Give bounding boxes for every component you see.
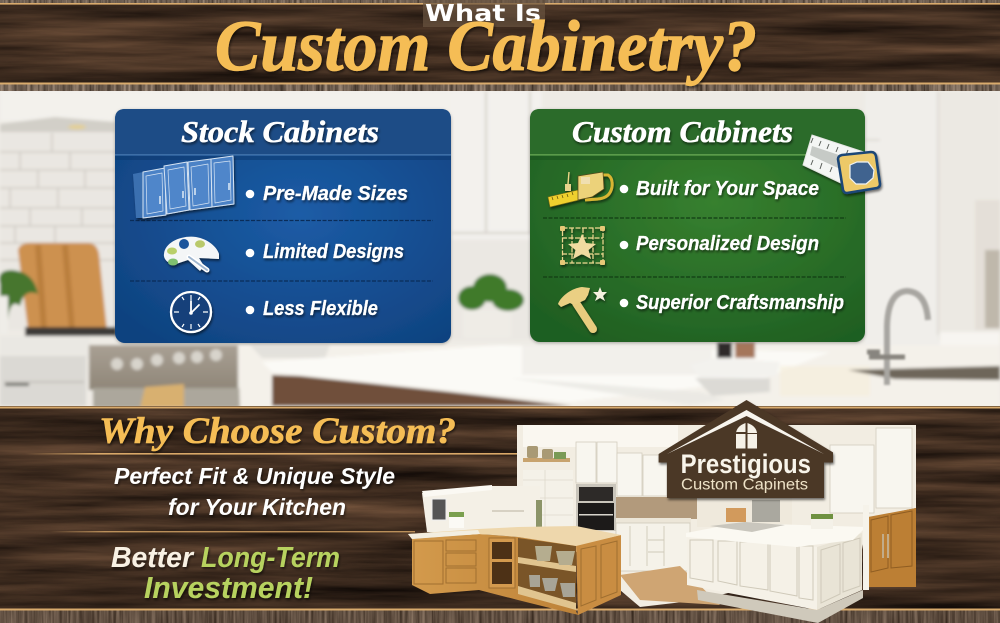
title: What Is — [425, 1, 541, 27]
oven — [576, 484, 616, 531]
top wood banner — [0, 0, 1000, 91]
bullet: less flexible: Less Flexible — [263, 297, 378, 320]
logo: prestigious custom capinets — [659, 400, 833, 498]
cutting board — [18, 243, 107, 330]
icon: tape measure — [803, 135, 880, 193]
upper cabinets — [576, 428, 912, 513]
callout: long-term investment — [111, 542, 340, 605]
callout: long-term investment: Better — [111, 542, 195, 574]
icon: window — [736, 423, 757, 448]
bullet: superior craftsmanship: Superior Craftsmanship — [636, 291, 844, 314]
kitchen illustration — [408, 425, 916, 623]
text: perfect fit — [114, 463, 395, 520]
roof chevron — [667, 410, 824, 454]
panel: stock cabinets — [115, 109, 451, 343]
sink — [848, 366, 1000, 380]
heading: custom cabinets: Custom Cabinets — [572, 114, 793, 149]
back lower cabinets — [616, 518, 691, 571]
icon: clock — [171, 292, 211, 332]
heading: stock cabinets: Stock Cabinets — [181, 114, 379, 149]
text: perfect fit: Perfect Fit & Unique Style — [114, 463, 395, 489]
background kitchen photo — [0, 85, 1000, 415]
oak cabinets — [408, 526, 621, 615]
shelf with pots — [523, 446, 570, 462]
bullet: personalized design: Personalized Design — [636, 232, 819, 255]
heading: why choose custom: Why Choose Custom? — [99, 411, 456, 452]
hutch — [422, 485, 542, 535]
logo: prestigious custom capinets: Prestigious — [681, 449, 811, 479]
dividers — [130, 220, 433, 281]
text: perfect fit: for Your Kitchen — [168, 494, 346, 520]
bullet: limited designs: Limited Designs — [263, 240, 404, 263]
callout: long-term investment: Investment! — [144, 570, 313, 605]
island — [686, 514, 866, 623]
icon: palette — [164, 237, 219, 271]
dividers — [543, 218, 846, 277]
backsplash — [616, 497, 698, 519]
icon: ruler and tape — [548, 172, 612, 207]
callout: long-term investment: Long-Term — [201, 542, 340, 574]
plant — [463, 310, 511, 338]
range — [89, 345, 238, 390]
back wall — [517, 425, 916, 607]
logo: prestigious custom capinets: Custom Capinets — [681, 476, 808, 494]
title: Custom Cabinetry? — [215, 6, 757, 86]
bottom wood banner — [0, 406, 1000, 623]
bullet: built for your space: Built for Your Space — [636, 177, 819, 200]
icon: cabinet doors — [133, 156, 234, 218]
icon: design grid with star — [560, 226, 605, 265]
bullet: pre-made sizes: Pre-Made Sizes — [263, 182, 408, 205]
counter and lower wood cabinets — [237, 385, 277, 406]
icon: hammer — [558, 287, 607, 329]
floor — [620, 566, 720, 605]
oak pantry — [868, 508, 916, 587]
panel: custom cabinets — [530, 109, 880, 342]
